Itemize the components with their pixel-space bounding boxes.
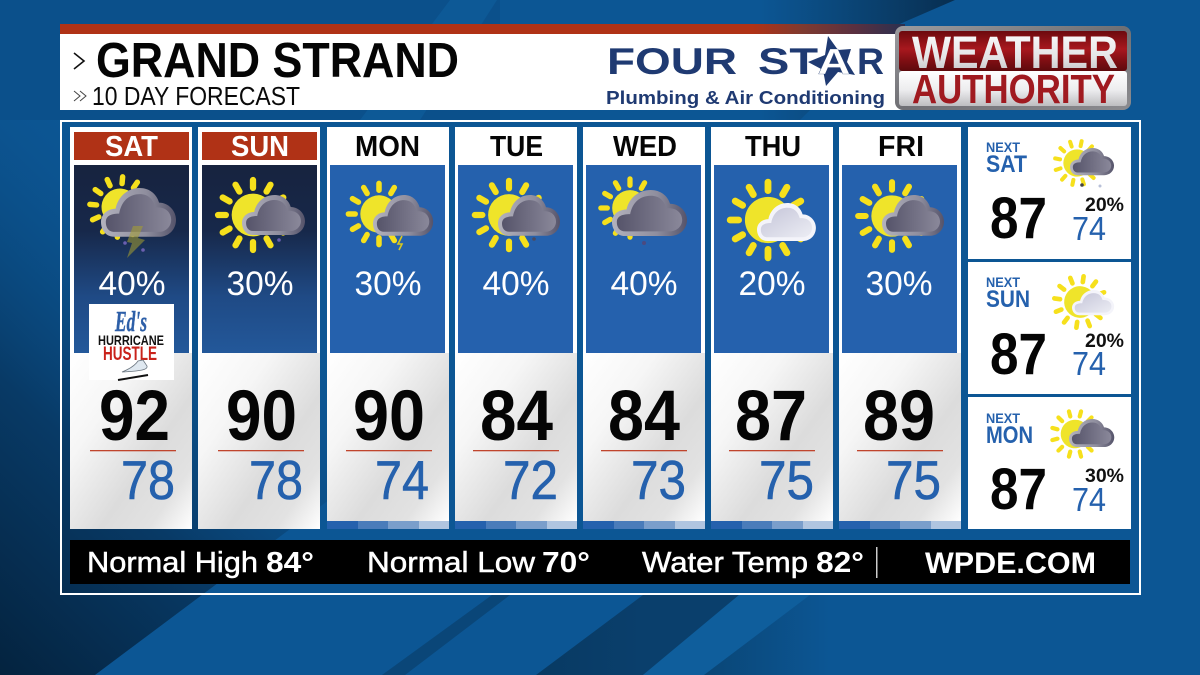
icon: rain bbox=[601, 179, 687, 245]
panel: Wednesday bbox=[583, 127, 705, 529]
panel: Saturday bbox=[70, 127, 192, 529]
sponsor logo: Four Star: FOUR bbox=[607, 41, 737, 82]
panel: Sunday bbox=[198, 127, 320, 529]
subtitle: 10 DAY FORECAST bbox=[92, 81, 300, 111]
badge: Weather Authority bbox=[895, 26, 1131, 112]
footer bar bbox=[70, 540, 1130, 584]
panel: Friday bbox=[839, 127, 961, 529]
panel: Tuesday: 72 bbox=[503, 449, 558, 511]
sponsor logo: Four Star: A bbox=[818, 41, 850, 82]
logo: Ed's Hurricane Hustle: HUSTLE bbox=[103, 344, 157, 365]
panel: Saturday: 92 bbox=[99, 377, 170, 456]
footer bar: 70° bbox=[542, 547, 590, 579]
panel: Next Monday: MON bbox=[986, 422, 1033, 449]
panel: Tuesday: 40% bbox=[482, 265, 550, 303]
panel: Monday: 90 bbox=[353, 377, 425, 456]
panel: Tuesday: TUE bbox=[490, 131, 543, 163]
icon: mostly sunny bbox=[1051, 273, 1114, 331]
panel: Tuesday: 84 bbox=[480, 377, 553, 456]
sponsor logo: Four Star: R bbox=[857, 41, 884, 82]
panel: Monday: 74 bbox=[375, 449, 429, 511]
panel: Tuesday bbox=[455, 127, 577, 529]
panel: Next Sunday: 74 bbox=[1072, 345, 1106, 382]
footer bar: Water Temp bbox=[642, 547, 808, 579]
forecast frame bbox=[61, 121, 1140, 594]
badge: Weather Authority: WEATHER bbox=[912, 27, 1118, 78]
icon: partly cloudy bbox=[218, 180, 305, 250]
icon: partly cloudy bbox=[858, 182, 944, 250]
sponsor logo: Four Star: Plumbing & Air Conditioning bbox=[606, 88, 885, 108]
sponsor logo: Four Star: ST bbox=[758, 41, 819, 82]
panel: Saturday: 78 bbox=[121, 449, 175, 511]
panel: Next Monday: 30% bbox=[1085, 466, 1124, 487]
panel: Monday: MON bbox=[355, 131, 420, 163]
panel: Sunday: 90 bbox=[226, 377, 297, 456]
panel: Saturday: 40% bbox=[98, 265, 166, 303]
panel: Thursday: 87 bbox=[735, 377, 807, 456]
header bar bbox=[60, 24, 905, 111]
footer bar: Normal High bbox=[87, 547, 258, 579]
panel: Next Saturday: 87 bbox=[990, 186, 1047, 251]
panel: Wednesday: 84 bbox=[608, 377, 680, 456]
icon: mostly sunny bbox=[730, 182, 816, 258]
footer bar: Normal Low bbox=[367, 547, 536, 579]
panel: Monday: 30% bbox=[354, 265, 422, 303]
icon: storm bbox=[87, 174, 176, 258]
panel: Wednesday: 40% bbox=[610, 265, 678, 303]
footer bar: 84° bbox=[266, 547, 314, 579]
panel: Wednesday: WED bbox=[613, 131, 677, 163]
panel: Next Saturday: 20% bbox=[1085, 195, 1124, 216]
panel: Friday: FRI bbox=[878, 131, 924, 163]
panel: Friday: 89 bbox=[863, 377, 935, 456]
panel: Next Monday: 87 bbox=[990, 457, 1047, 522]
panel: Sunday: 30% bbox=[226, 265, 294, 303]
badge: Weather Authority: AUTHORITY bbox=[912, 66, 1115, 112]
panel: Next Sunday: SUN bbox=[986, 286, 1030, 313]
panel: Monday bbox=[327, 127, 449, 529]
logo: Ed's Hurricane Hustle: HURRICANE bbox=[98, 332, 164, 348]
panel: Next Sunday: 20% bbox=[1085, 331, 1124, 352]
title: GRAND STRAND bbox=[96, 34, 459, 88]
panel: Next Sunday bbox=[968, 262, 1131, 394]
panel: Friday: 75 bbox=[886, 449, 941, 511]
panel: Friday: 30% bbox=[866, 265, 932, 303]
icon: rain bbox=[475, 181, 560, 249]
panel: Next Saturday: NEXT bbox=[986, 139, 1020, 155]
footer bar: WPDE.COM bbox=[925, 547, 1096, 580]
panel: Next Sunday: NEXT bbox=[986, 274, 1020, 290]
sponsor logo: Four Star bbox=[606, 36, 885, 108]
subtitle chevrons bbox=[74, 91, 86, 101]
panel: Thursday: 20% bbox=[738, 265, 806, 303]
panel: Next Saturday: 74 bbox=[1072, 210, 1106, 247]
title chevron bbox=[74, 53, 84, 69]
panel: Thursday bbox=[711, 127, 833, 529]
footer bar: 82° bbox=[816, 547, 864, 579]
icon: partly cloudy bbox=[1046, 405, 1114, 463]
panel: Next Sunday: 87 bbox=[990, 322, 1047, 387]
panel: Next Saturday: SAT bbox=[986, 151, 1027, 178]
icon: storm bbox=[348, 183, 433, 250]
logo: Ed's Hurricane Hustle: Ed's bbox=[114, 306, 147, 338]
panel: Sunday: 78 bbox=[249, 449, 303, 511]
panel: Wednesday: 73 bbox=[631, 449, 686, 511]
icon: showers bbox=[1051, 137, 1114, 189]
panel: Next Monday: NEXT bbox=[986, 410, 1020, 426]
panel: Thursday: 75 bbox=[759, 449, 814, 511]
panel: Saturday: SAT bbox=[105, 131, 158, 163]
logo: Ed's Hurricane Hustle bbox=[89, 304, 174, 380]
panel: Next Saturday bbox=[968, 127, 1131, 259]
panel: Next Monday bbox=[968, 397, 1131, 529]
panel: Next Monday: 74 bbox=[1072, 481, 1106, 518]
panel: Sunday: SUN bbox=[231, 131, 289, 163]
panel: Thursday: THU bbox=[745, 131, 801, 163]
